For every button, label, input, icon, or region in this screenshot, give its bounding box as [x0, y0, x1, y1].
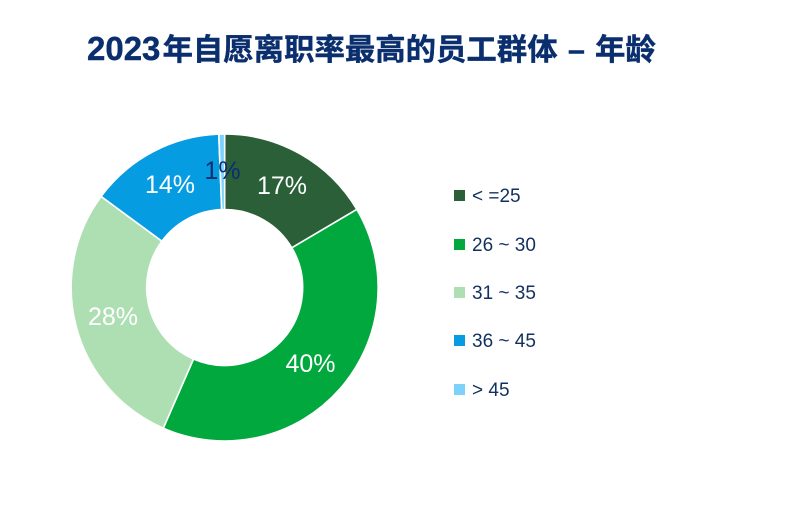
legend item: <=25: < =25 [472, 186, 521, 207]
legend item: 36~45: 36 ~ 45 [472, 331, 536, 352]
title: – [568, 33, 585, 67]
legend item: >45: > 45 [472, 380, 510, 401]
segment: 31~35 28% [71, 196, 194, 428]
legend item: >45 [454, 380, 510, 401]
label: 17%: 17% [257, 172, 307, 200]
legend [454, 186, 536, 401]
label: 14%: 14% [145, 171, 195, 199]
legend item: 26~30: 26 ~ 30 [472, 235, 536, 256]
segment: 36~45 14% [101, 134, 222, 241]
data labels [88, 157, 336, 378]
segment: <=25 17% [225, 134, 357, 248]
segment: 26~30 40% [163, 209, 378, 441]
label: 28%: 28% [88, 303, 138, 331]
title: 年自愿离职率最高的员工群体 [162, 33, 558, 67]
title: 2023 [87, 30, 160, 67]
segment: >45 1% [219, 134, 225, 210]
title: 年龄 [595, 33, 656, 67]
label: 40%: 40% [285, 350, 336, 378]
legend item: 31~35: 31 ~ 35 [472, 283, 536, 304]
donut chart [71, 134, 378, 441]
label: 1%: 1% [204, 157, 241, 185]
